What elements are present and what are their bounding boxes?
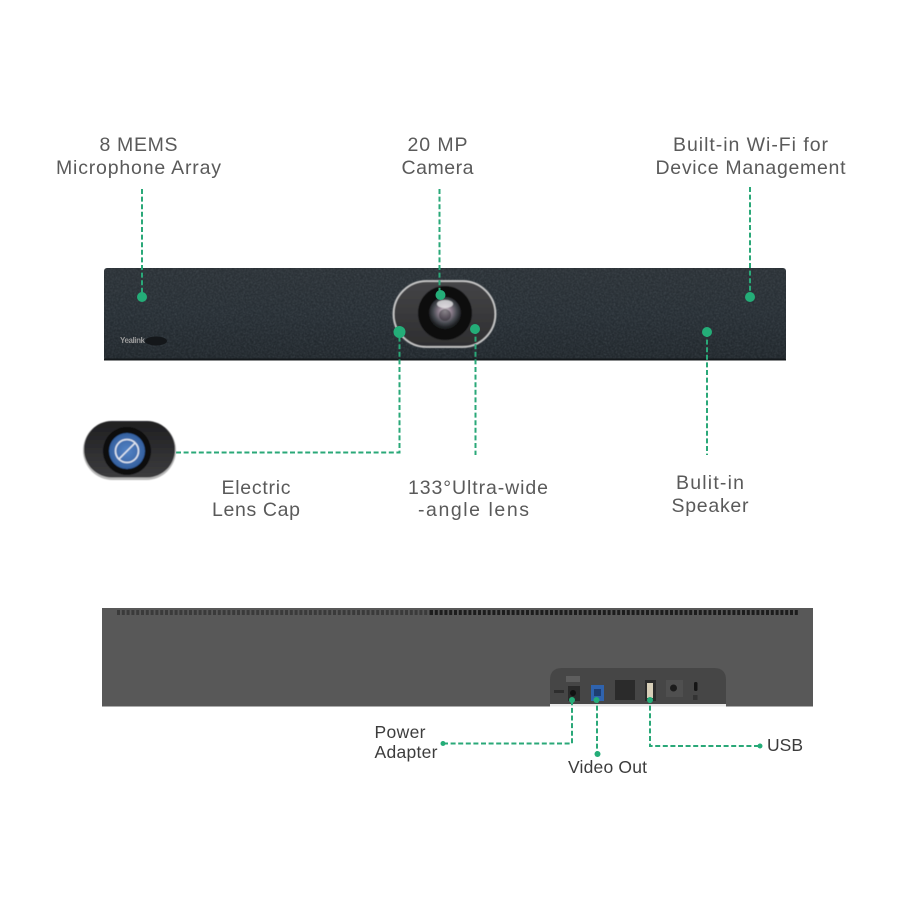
camera housing <box>394 281 496 347</box>
label: Electric Lens Cap: Electric <box>222 477 291 499</box>
ethernet port <box>615 680 635 700</box>
label: Power Adapter: Adapter <box>374 742 438 762</box>
label: Built-in Speaker: Bulit-in <box>676 472 744 494</box>
label: 8 MEMS Microphone Array: Microphone Array <box>56 157 221 179</box>
icon: electric lens cap closed <box>83 421 176 480</box>
leader: microphone array <box>137 189 147 302</box>
video out port <box>591 685 604 701</box>
usb port <box>645 680 656 701</box>
label: Built-in Wi-Fi for Device Management: Device Management <box>656 157 846 179</box>
power port <box>554 676 580 701</box>
Yealink logo: Yealink <box>120 336 146 345</box>
lock slot <box>693 682 698 700</box>
leader: speaker <box>702 327 712 455</box>
label: USB: USB <box>767 735 803 755</box>
leader: wide-angle lens <box>470 324 480 455</box>
leader: power adapter <box>440 697 575 746</box>
Yealink logo <box>120 336 167 346</box>
label: Electric Lens Cap: Lens Cap <box>212 499 300 521</box>
leader: lens cap <box>176 326 406 452</box>
front view of video bar <box>104 268 786 360</box>
leader: Wi-Fi <box>745 187 755 302</box>
leader: camera <box>436 189 446 300</box>
leader: USB <box>647 697 762 748</box>
rear view of video bar <box>102 608 813 706</box>
label: 133° Ultra-wide-angle lens: -angle lens <box>418 499 529 521</box>
label: 133° Ultra-wide-angle lens: 133°Ultra-wide <box>408 477 548 499</box>
label: 20 MP Camera: Camera <box>402 157 474 179</box>
label: Video Out: Video Out <box>568 757 647 777</box>
label: 20 MP Camera: 20 MP <box>408 134 468 156</box>
leader: video out <box>594 697 600 757</box>
label: 8 MEMS Microphone Array: 8 MEMS <box>100 134 178 156</box>
vent slots <box>117 610 430 615</box>
label: Power Adapter: Power <box>374 722 426 742</box>
label: Built-in Wi-Fi for Device Management: Built-in Wi-Fi for <box>673 134 828 156</box>
round port <box>666 680 683 697</box>
label: Built-in Speaker: Speaker <box>672 495 749 517</box>
port recess <box>550 668 726 706</box>
